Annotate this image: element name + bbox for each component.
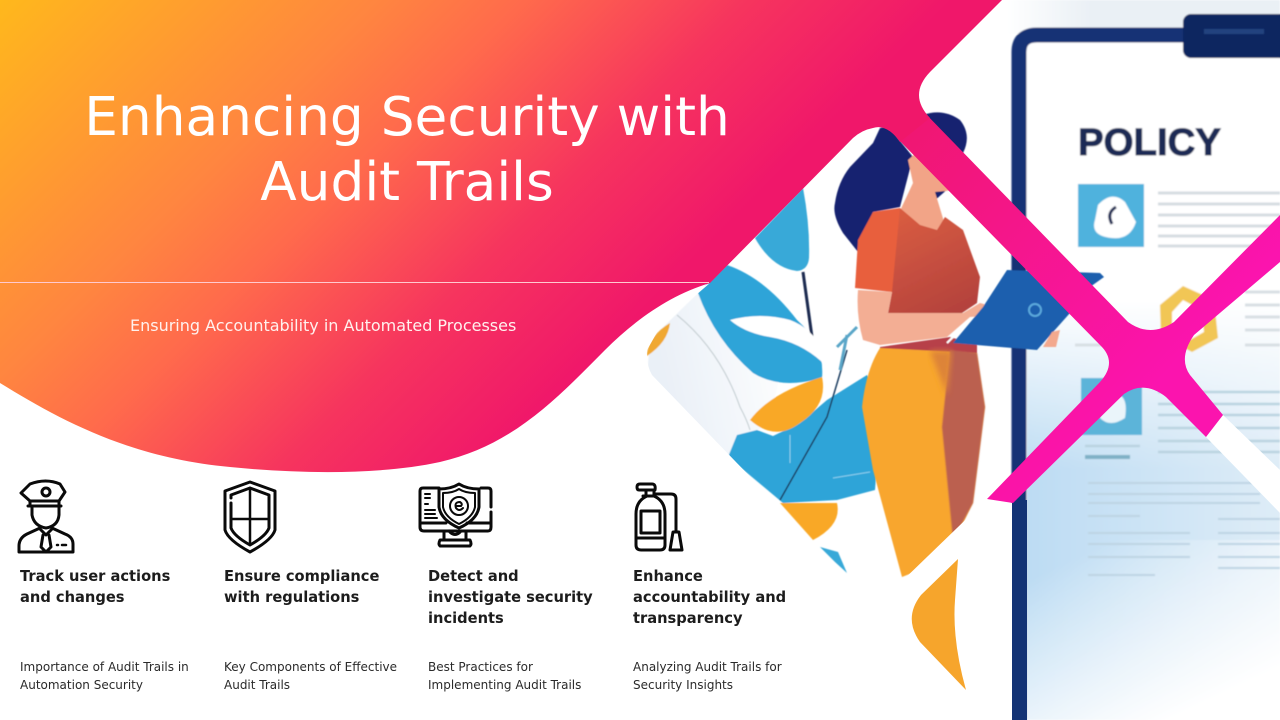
illustration: leaves xyxy=(647,188,882,573)
heading: Ensure compliance with regulations xyxy=(224,568,379,606)
divider line xyxy=(0,282,709,283)
description xyxy=(633,660,782,692)
column 3 xyxy=(418,482,593,692)
column 4 xyxy=(633,482,786,692)
frame continuation below the stripe xyxy=(1012,500,1027,720)
gradient header blob xyxy=(0,0,1002,472)
column 2 xyxy=(224,480,397,692)
description: Best Practices for xyxy=(428,660,533,674)
icon: fire extinguisher xyxy=(634,482,684,552)
white gap above leaves xyxy=(630,283,710,370)
title: Audit Trails xyxy=(260,150,554,213)
description: Security Insights xyxy=(633,678,733,692)
description: Implementing Audit Trails xyxy=(428,678,581,692)
description: Audit Trails xyxy=(224,678,290,692)
title: Enhancing Security with xyxy=(84,85,730,148)
description: Key Components of Effective xyxy=(224,660,397,674)
description xyxy=(428,660,581,692)
pink X shape xyxy=(897,110,1280,503)
description xyxy=(20,660,189,692)
icon: officer xyxy=(18,480,74,554)
heading: Track user actions and changes xyxy=(20,568,170,606)
column 1 xyxy=(18,480,189,692)
white diagonal stripe lower right xyxy=(1206,415,1280,513)
illustration: woman xyxy=(834,112,1104,577)
icon: shield xyxy=(224,480,276,554)
subtitle: Ensuring Accountability in Automated Processes xyxy=(130,316,516,335)
illustration: lower leg piece xyxy=(912,559,966,690)
title xyxy=(84,85,730,213)
description xyxy=(224,660,397,692)
description: Automation Security xyxy=(20,678,143,692)
heading: Enhance accountability and transparency xyxy=(633,568,786,627)
description: Importance of Audit Trails in xyxy=(20,660,189,674)
white mask: lower left area xyxy=(0,300,1012,720)
illustration: policy document xyxy=(1000,0,1280,720)
heading: Detect and investigate security incidents xyxy=(428,568,593,627)
icon: monitor with shield xyxy=(418,482,492,548)
description: Analyzing Audit Trails for xyxy=(633,660,782,674)
illustration: policy document: POLICY xyxy=(1078,122,1221,164)
